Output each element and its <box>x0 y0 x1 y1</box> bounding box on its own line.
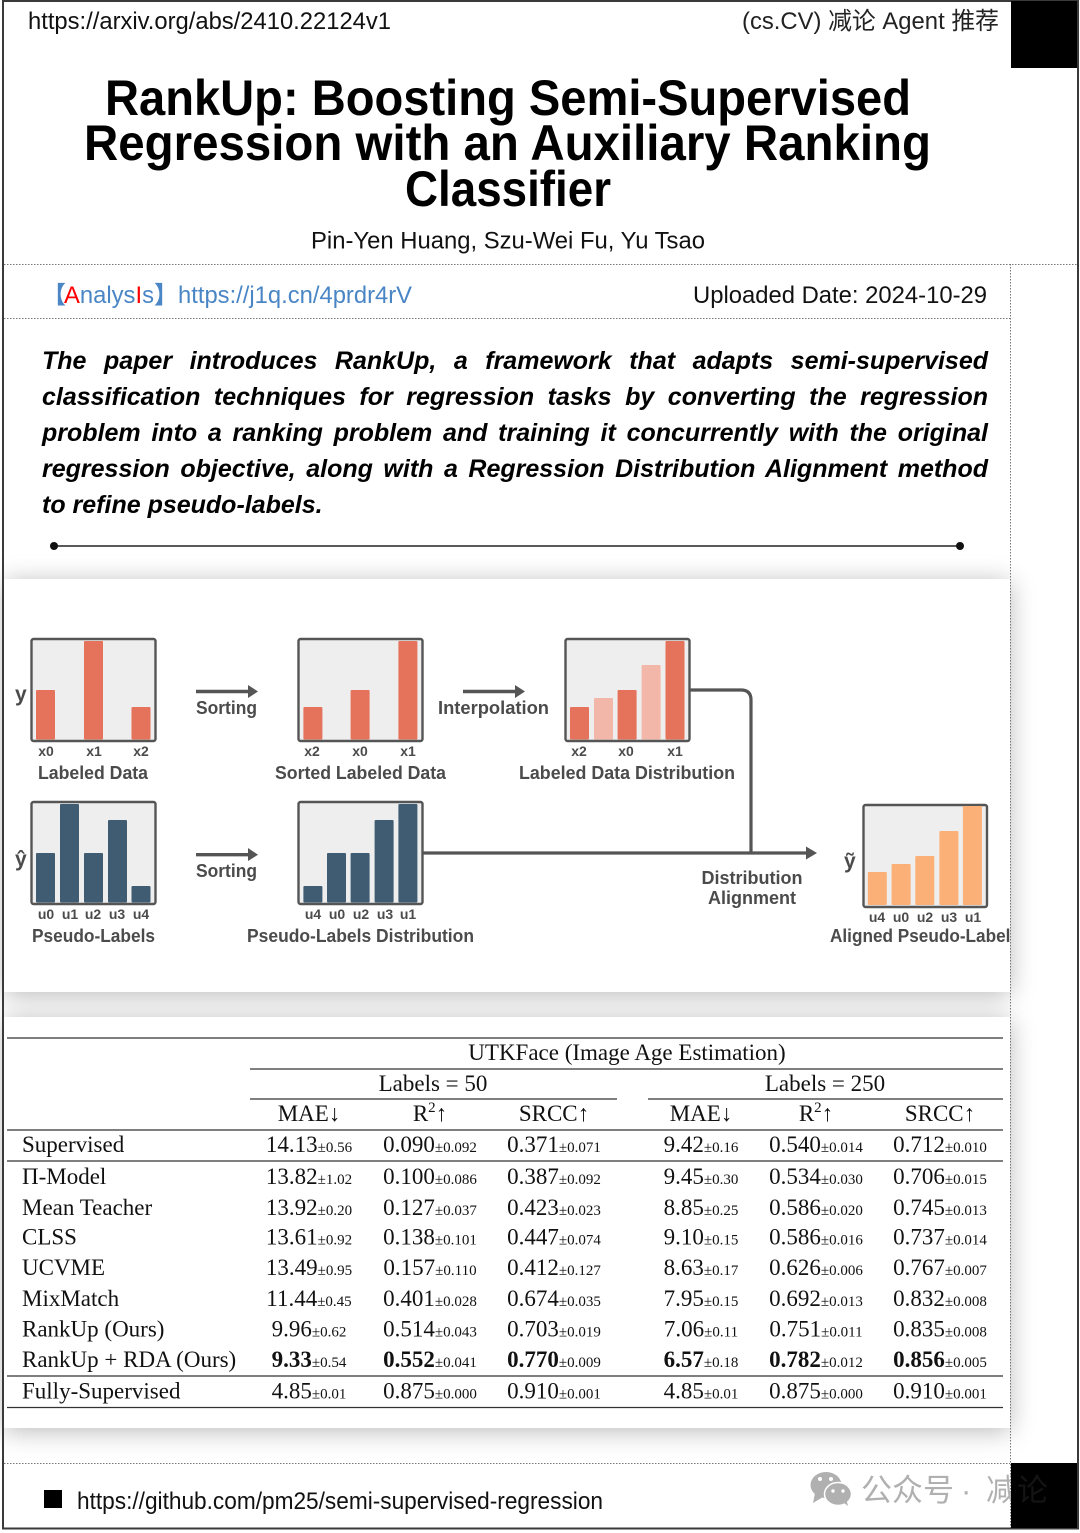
row: Pi-Model <box>22 1164 987 1189</box>
chart: labeled data: Labeled Data <box>38 763 149 783</box>
chart: sorted labeled data: x0 <box>352 743 368 759</box>
row: CLSS: 9.10±0.15 <box>664 1224 738 1250</box>
row: CLSS: 0.737±0.014 <box>893 1224 987 1250</box>
table header <box>278 1040 975 1126</box>
chart: sorted labeled data: x1 <box>400 743 416 759</box>
row: Pi-Model: 0.706±0.015 <box>893 1164 987 1189</box>
row: Supervised <box>22 1132 987 1157</box>
chart: labeled data distribution: Labeled Data Distribution <box>519 763 735 783</box>
row: RankUp + RDA (Ours): 9.33±0.54 <box>272 1347 347 1372</box>
arrow: distribution alignment connector: Distribution <box>702 868 802 888</box>
row: UCVME <box>22 1255 987 1280</box>
analysis link: 】 <box>154 282 178 309</box>
row: Mean Teacher: 13.92±0.20 <box>266 1195 352 1220</box>
table header: ↑ <box>436 1101 447 1126</box>
row: RankUp (Ours): 0.514±0.043 <box>383 1316 477 1342</box>
row: Mean Teacher: 8.85±0.25 <box>664 1195 738 1220</box>
chart: aligned pseudo-labels: u0 <box>893 909 909 925</box>
abstract text block: classification techniques for regression tasks by converting the regression <box>42 383 988 411</box>
row: CLSS <box>22 1224 987 1250</box>
panel: diagram card <box>4 579 1010 992</box>
row: Supervised: 9.42±0.16 <box>664 1132 739 1157</box>
chart: labeled data distribution: x2 <box>571 743 587 759</box>
row: RankUp (Ours): 0.835±0.008 <box>893 1316 987 1342</box>
watermark text <box>862 1474 1011 1504</box>
chart: sorted labeled data <box>275 639 447 783</box>
footer github link: https://github.com/pm25/semi-supervised-regression <box>77 1488 603 1515</box>
row: Supervised: 0.712±0.010 <box>893 1132 987 1157</box>
row: MixMatch: 0.832±0.008 <box>893 1286 987 1311</box>
row: Pi-Model: 0.100±0.086 <box>383 1164 477 1189</box>
row: UCVME: 0.626±0.006 <box>769 1255 863 1280</box>
row: Supervised: 0.540±0.014 <box>769 1132 863 1157</box>
abstract text block <box>42 347 988 519</box>
chart: aligned pseudo-labels: u4 <box>869 909 885 925</box>
analysis link: 【 <box>42 282 66 309</box>
row: MixMatch <box>22 1286 987 1311</box>
row: CLSS: 0.447±0.074 <box>507 1224 601 1250</box>
row: Fully-Supervised: 4.85±0.01 <box>272 1378 346 1404</box>
row: Fully-Supervised: 0.910±0.001 <box>893 1378 987 1404</box>
row: RankUp (Ours): 9.96±0.62 <box>272 1316 346 1342</box>
analysis link: https://j1q.cn/4prdr4rV <box>178 282 412 309</box>
watermark text: · <box>961 1473 971 1508</box>
row: RankUp + RDA (Ours) <box>22 1347 987 1372</box>
chart: pseudo-labels: Pseudo-Labels <box>32 926 155 946</box>
row: CLSS: CLSS <box>22 1224 77 1250</box>
row: MixMatch: MixMatch <box>22 1286 120 1311</box>
row: Supervised: 0.371±0.071 <box>507 1132 601 1157</box>
row: Mean Teacher: 0.127±0.037 <box>383 1195 477 1220</box>
arrow: distribution alignment connector <box>423 690 817 908</box>
chart: sorted labeled data: x2 <box>304 743 320 759</box>
row: MixMatch: 0.674±0.035 <box>507 1286 601 1311</box>
arrow: sorting labeled data: Sorting <box>196 698 257 718</box>
watermark text: 减 <box>986 1473 1017 1508</box>
row: Fully-Supervised: 0.875±0.000 <box>769 1378 863 1404</box>
row: Mean Teacher: 0.586±0.020 <box>769 1195 863 1220</box>
chart: sorted labeled data: Sorted Labeled Data <box>275 763 447 783</box>
table header: 2 <box>428 1100 436 1116</box>
row: Fully-Supervised: Fully-Supervised <box>22 1378 181 1404</box>
header category: (cs.CV) 减论 Agent 推荐 <box>742 8 999 35</box>
analysis link: AnalysIs <box>64 282 154 309</box>
arrow: interpolation <box>438 685 549 718</box>
title: Regression with an Auxiliary Ranking <box>84 115 931 171</box>
chart: pseudo-labels distribution <box>247 802 474 946</box>
chart: aligned pseudo-labels: Aligned Pseudo-Labels <box>830 926 1020 946</box>
row: Pi-Model: 0.534±0.030 <box>769 1164 863 1189</box>
row: Supervised: 14.13±0.56 <box>266 1132 353 1157</box>
table header: MAE↓ <box>670 1101 732 1126</box>
row: CLSS: 0.138±0.101 <box>383 1224 477 1250</box>
chart: pseudo-labels: u3 <box>109 906 125 922</box>
diagram <box>15 639 1020 946</box>
results table <box>7 1038 1003 1408</box>
table header: Labels = 50 <box>379 1071 487 1096</box>
row: UCVME: 8.63±0.17 <box>664 1255 739 1280</box>
row: MixMatch: 7.95±0.15 <box>664 1286 738 1311</box>
watermark text on black block: 论 <box>1017 1473 1048 1508</box>
chart: pseudo-labels distribution: u3 <box>377 906 393 922</box>
title: Classifier <box>405 161 611 217</box>
black corner block bottom right <box>1011 1463 1077 1528</box>
chart: labeled data: x0 <box>38 743 54 759</box>
chart: aligned pseudo-labels: ỹ <box>844 850 856 873</box>
row: RankUp + RDA (Ours): RankUp + RDA (Ours) <box>22 1347 236 1372</box>
row: MixMatch: 0.401±0.028 <box>383 1286 477 1311</box>
row: RankUp (Ours) <box>22 1316 987 1342</box>
chart: pseudo-labels: u0 <box>38 906 54 922</box>
black corner block top right <box>1011 1 1077 68</box>
title: RankUp: Boosting Semi-Supervised <box>105 70 911 126</box>
chart: labeled data: x1 <box>86 743 102 759</box>
row: RankUp (Ours): 0.703±0.019 <box>507 1316 601 1342</box>
table header: Labels = 250 <box>765 1071 885 1096</box>
row: Mean Teacher: 0.745±0.013 <box>893 1195 987 1220</box>
row: UCVME: UCVME <box>22 1255 105 1280</box>
row: Mean Teacher: 0.423±0.023 <box>507 1195 601 1220</box>
row: CLSS: 0.586±0.016 <box>769 1224 863 1250</box>
table header: ↑ <box>822 1101 833 1126</box>
chart: labeled data distribution <box>519 639 735 783</box>
row: Supervised: Supervised <box>22 1132 125 1157</box>
chart: labeled data distribution: x0 <box>618 743 634 759</box>
row: UCVME: 0.767±0.007 <box>893 1255 987 1280</box>
row: RankUp + RDA (Ours): 0.856±0.005 <box>893 1347 987 1372</box>
row: RankUp + RDA (Ours): 6.57±0.18 <box>664 1347 738 1372</box>
chart: pseudo-labels: u4 <box>133 906 149 922</box>
arrow: sorting pseudo-labels <box>196 848 258 881</box>
row: RankUp + RDA (Ours): 0.552±0.041 <box>383 1347 477 1372</box>
row: Fully-Supervised: 4.85±0.01 <box>664 1378 738 1404</box>
row: Pi-Model: 0.387±0.092 <box>507 1164 601 1189</box>
chart: labeled data: x2 <box>133 743 149 759</box>
arrow: sorting labeled data <box>196 685 258 718</box>
chart: aligned pseudo-labels <box>830 805 1020 946</box>
row: Fully-Supervised: 0.910±0.001 <box>507 1378 601 1404</box>
row: UCVME: 13.49±0.95 <box>266 1255 352 1280</box>
table rules <box>7 1038 1003 1408</box>
row: Supervised: 0.090±0.092 <box>383 1132 477 1157</box>
chart: pseudo-labels distribution: u1 <box>400 906 416 922</box>
row: Fully-Supervised <box>22 1378 987 1404</box>
chart: labeled data: y <box>15 683 27 706</box>
row: Pi-Model: 13.82±1.02 <box>266 1164 352 1189</box>
table header: SRCC↑ <box>905 1101 975 1126</box>
arrow: sorting pseudo-labels: Sorting <box>196 861 257 881</box>
row: UCVME: 0.157±0.110 <box>383 1255 477 1280</box>
title <box>84 70 931 217</box>
panel: results table card <box>4 1017 1010 1428</box>
abstract text block: regression objective, along with a Regression Distribution Alignment method <box>42 455 988 483</box>
watermark text: 公众号 <box>861 1473 954 1508</box>
row: UCVME: 0.412±0.127 <box>507 1255 601 1280</box>
row: Mean Teacher <box>22 1195 987 1220</box>
row: Mean Teacher: Mean Teacher <box>22 1195 152 1220</box>
table header: UTKFace (Image Age Estimation) <box>468 1040 786 1065</box>
upload date: Uploaded Date: 2024-10-29 <box>693 282 987 309</box>
chart: pseudo-labels distribution: u4 <box>305 906 321 922</box>
table header: MAE↓ <box>278 1101 340 1126</box>
icon: wechat watermark <box>810 1472 852 1506</box>
row: Pi-Model: Π-Model <box>22 1164 106 1189</box>
chart: pseudo-labels <box>15 802 156 946</box>
table header: 2 <box>814 1100 822 1116</box>
abstract text block: to refine pseudo-labels. <box>42 491 323 519</box>
row: CLSS: 13.61±0.92 <box>266 1224 352 1250</box>
chart: pseudo-labels distribution: u2 <box>353 906 369 922</box>
chart: labeled data <box>15 639 156 783</box>
table header: R <box>799 1101 814 1126</box>
chart: pseudo-labels distribution: u0 <box>329 906 345 922</box>
chart: pseudo-labels: u1 <box>62 906 78 922</box>
arrow: interpolation: Interpolation <box>438 698 549 718</box>
row: RankUp (Ours): 7.06±0.11 <box>664 1316 738 1342</box>
chart: pseudo-labels: ŷ <box>15 848 27 871</box>
abstract text block: problem into a ranking problem and training it concurrently with the original <box>42 419 988 447</box>
footer bullet <box>44 1490 62 1508</box>
chart: aligned pseudo-labels: u3 <box>941 909 957 925</box>
row: MixMatch: 0.692±0.013 <box>769 1286 863 1311</box>
chart: pseudo-labels: u2 <box>85 906 101 922</box>
row: RankUp + RDA (Ours): 0.770±0.009 <box>507 1347 601 1372</box>
row: MixMatch: 11.44±0.45 <box>266 1286 352 1311</box>
chart: aligned pseudo-labels: u1 <box>965 909 981 925</box>
authors: Pin-Yen Huang, Szu-Wei Fu, Yu Tsao <box>311 228 705 254</box>
chart: pseudo-labels distribution: Pseudo-Labels Distribution <box>247 926 474 946</box>
abstract text block: The paper introduces RankUp, a framework that adapts semi-supervised <box>42 347 988 375</box>
row: RankUp + RDA (Ours): 0.782±0.012 <box>769 1347 863 1372</box>
arrow: distribution alignment connector: Alignment <box>708 888 796 908</box>
chart: aligned pseudo-labels: u2 <box>917 909 933 925</box>
table header: SRCC↑ <box>519 1101 589 1126</box>
abstract divider <box>50 542 964 550</box>
chart: labeled data distribution: x1 <box>667 743 683 759</box>
row: RankUp (Ours): 0.751±0.011 <box>769 1316 863 1342</box>
row: RankUp (Ours): RankUp (Ours) <box>22 1316 164 1342</box>
row: Pi-Model: 9.45±0.30 <box>664 1164 738 1189</box>
table header: R <box>413 1101 428 1126</box>
row: Fully-Supervised: 0.875±0.000 <box>383 1378 477 1404</box>
analysis link <box>42 282 412 309</box>
header source link: https://arxiv.org/abs/2410.22124v1 <box>28 8 391 35</box>
